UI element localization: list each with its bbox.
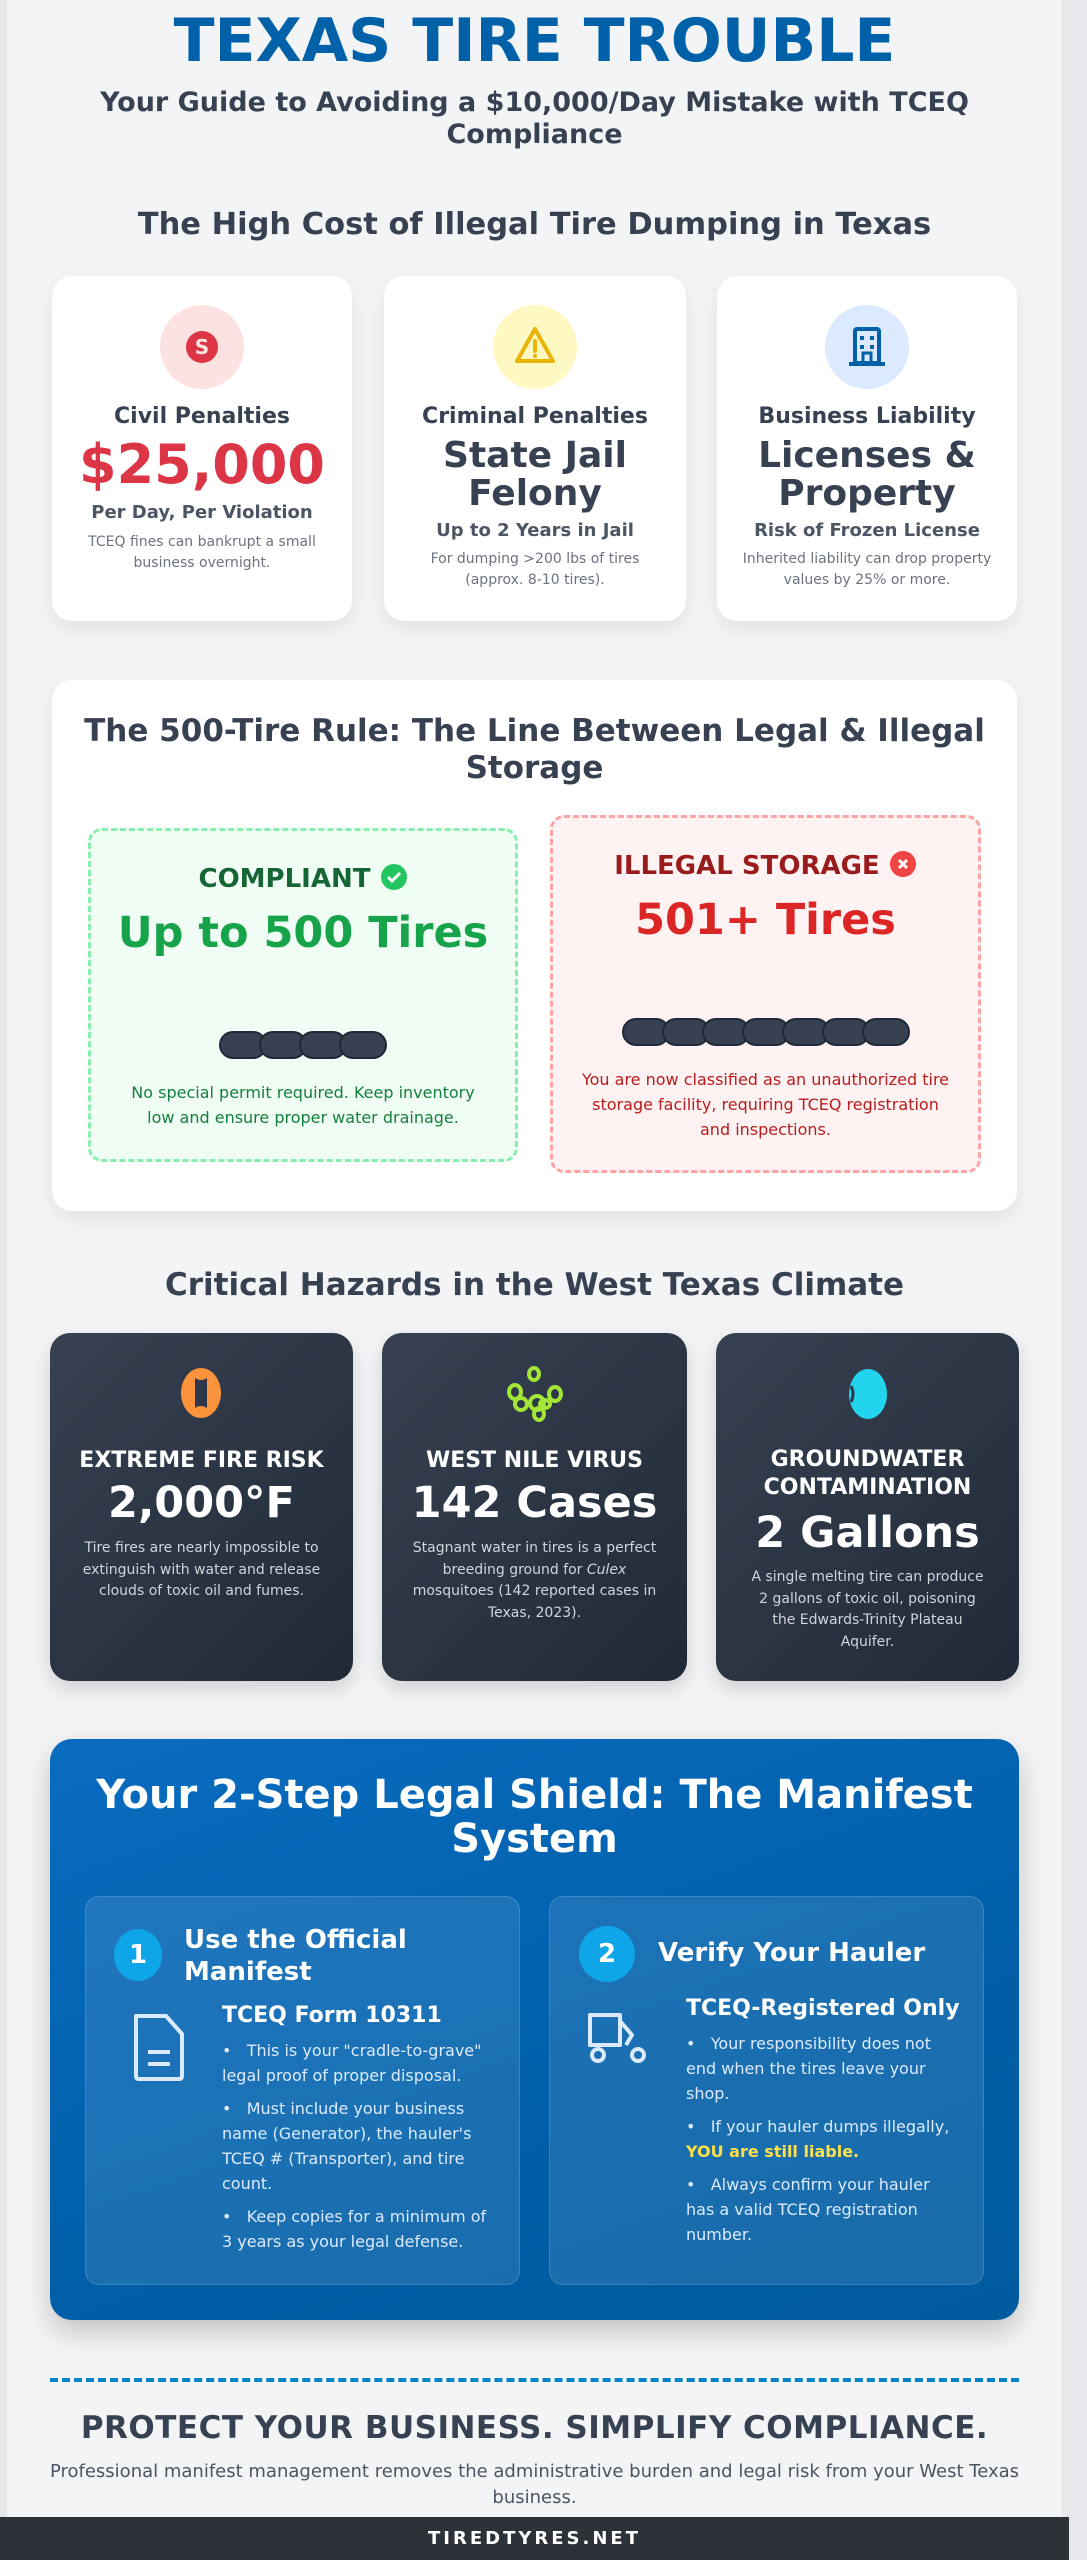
icon: drop (849, 1369, 887, 1419)
panel: criminal penalties: Felony (468, 473, 602, 514)
icon: virus (507, 1366, 563, 1422)
box: illegal storage (550, 815, 981, 1173)
panel: business liability: Risk of Frozen License (754, 520, 980, 541)
panel: west nile: Stagnant water in tires is a perfect breeding ground for Culex mosquitoes (142 reported cases in Texas, 2023). (413, 1540, 656, 1620)
panel: 500-tire rule (52, 680, 1017, 1211)
badge 2: 2 (598, 1939, 616, 1969)
step 1 card: • Keep copies for a minimum of 3 years as your legal defense. (222, 2207, 486, 2251)
panel: groundwater: A single melting tire can produce 2 gallons of toxic oil, poisoning the Edwards-Trinity Plateau Aquifer. (751, 1569, 984, 1650)
panel: criminal penalties: Up to 2 Years in Jail (436, 520, 634, 541)
panel: civil penalties: Civil Penalties (114, 404, 290, 429)
box: compliant: No special permit required. Keep inventory low and ensure proper water drainage. (131, 1083, 475, 1127)
panel: civil penalties: $25,000 (79, 433, 325, 496)
icon: document (134, 2014, 184, 2081)
step 2 card: • If your hauler dumps illegally, YOU are still liable. (686, 2117, 949, 2161)
step 1 card: • Must include your business name (Generator), the hauler's TCEQ # (Transporter), and tire count. (222, 2099, 471, 2193)
step 2 card: TCEQ-Registered Only (686, 1996, 960, 2021)
step 1 card: Use the Official (184, 1925, 407, 1955)
heading: manifest: Your 2-Step Legal Shield: The Manifest System (96, 1772, 973, 1862)
panel: business liability: Property (778, 473, 956, 514)
panel: fire risk (50, 1333, 353, 1681)
panel: west nile (382, 1333, 687, 1681)
icon: money: S (195, 335, 209, 359)
panel: business liability: Business Liability (758, 404, 976, 429)
subtitle: Your Guide to Avoiding a $10,000/Day Mistake with TCEQ Compliance (100, 87, 969, 150)
step 1 card (85, 1896, 520, 2285)
badge 1: 1 (129, 1940, 147, 1970)
panel: criminal penalties (384, 276, 686, 621)
box: compliant: Up to 500 Tires (118, 908, 488, 958)
step 1 card: • This is your "cradle-to-grave" legal proof of proper disposal. (222, 2041, 482, 2085)
panel: west nile: WEST NILE VIRUS (426, 1448, 643, 1473)
badge 1 (114, 1929, 162, 1981)
panel: civil penalties: TCEQ fines can bankrupt a small business overnight. (88, 534, 316, 571)
badge 2 (579, 1926, 635, 1982)
panel: criminal penalties: Criminal Penalties (422, 404, 648, 429)
panel: groundwater: GROUNDWATER CONTAMINATION (764, 1447, 971, 1500)
panel: manifest system (50, 1739, 1019, 2320)
icon: fire (181, 1368, 221, 1418)
panel: business liability: Inherited liability can drop property values by 25% or more. (743, 551, 991, 588)
icon: warning (493, 305, 577, 389)
heading: call to action: PROTECT YOUR BUSINESS. SIMPLIFY COMPLIANCE. (81, 2410, 988, 2446)
step 1 card: TCEQ Form 10311 (222, 2003, 442, 2028)
icon: tire stack small (219, 1031, 387, 1059)
step 2 card (549, 1896, 984, 2285)
heading: hazards: Critical Hazards in the West Texas Climate (165, 1267, 904, 1303)
panel: fire risk: EXTREME FIRE RISK (79, 1448, 324, 1473)
heading: 500-tire rule: The 500-Tire Rule: The Line Between Legal & Illegal Storage (84, 713, 985, 786)
step 2 card: • Your responsibility does not end when the tires leave your shop. (686, 2034, 931, 2103)
panel: fire risk: 2,000°F (108, 1478, 295, 1528)
step 1 card: Manifest (184, 1957, 312, 1987)
step 2 card: • Always confirm your hauler has a valid TCEQ registration number. (686, 2175, 930, 2244)
panel: civil penalties (52, 276, 352, 621)
label: illegal: ILLEGAL STORAGE (614, 851, 880, 881)
panel: west nile: 142 Cases (412, 1478, 657, 1528)
label: compliant: COMPLIANT (198, 864, 370, 894)
panel: criminal penalties: For dumping >200 lbs of tires (approx. 8-10 tires). (431, 551, 639, 588)
title: TEXAS TIRE TROUBLE (174, 6, 895, 76)
icon: money (160, 305, 244, 389)
footer: TIREDTYRES.NET (428, 2528, 641, 2549)
footer (0, 2517, 1069, 2560)
icon: building (825, 305, 909, 389)
panel: groundwater: 2 Gallons (755, 1508, 980, 1558)
icon: tire stack large (622, 1018, 910, 1046)
icon: truck (588, 2013, 646, 2063)
box: illegal storage: 501+ Tires (635, 895, 896, 945)
panel: criminal penalties: State Jail (443, 435, 627, 476)
box: compliant (88, 828, 518, 1162)
panel: business liability: Licenses & (758, 435, 976, 476)
text: cta paragraph: Professional manifest management removes the administrative burden and legal risk from your West Texas business. (50, 2461, 1019, 2508)
panel: civil penalties: Per Day, Per Violation (91, 502, 313, 523)
heading: high cost: The High Cost of Illegal Tire Dumping in Texas (138, 207, 931, 242)
panel: business liability (717, 276, 1017, 621)
panel: groundwater (716, 1333, 1019, 1681)
panel: fire risk: Tire fires are nearly impossible to extinguish with water and release clouds of toxic oil and fumes. (83, 1540, 320, 1599)
step 2 card: Verify Your Hauler (658, 1938, 925, 1968)
box: illegal storage: You are now classified as an unauthorized tire storage facility, requiring TCEQ registration and inspections. (582, 1070, 949, 1139)
